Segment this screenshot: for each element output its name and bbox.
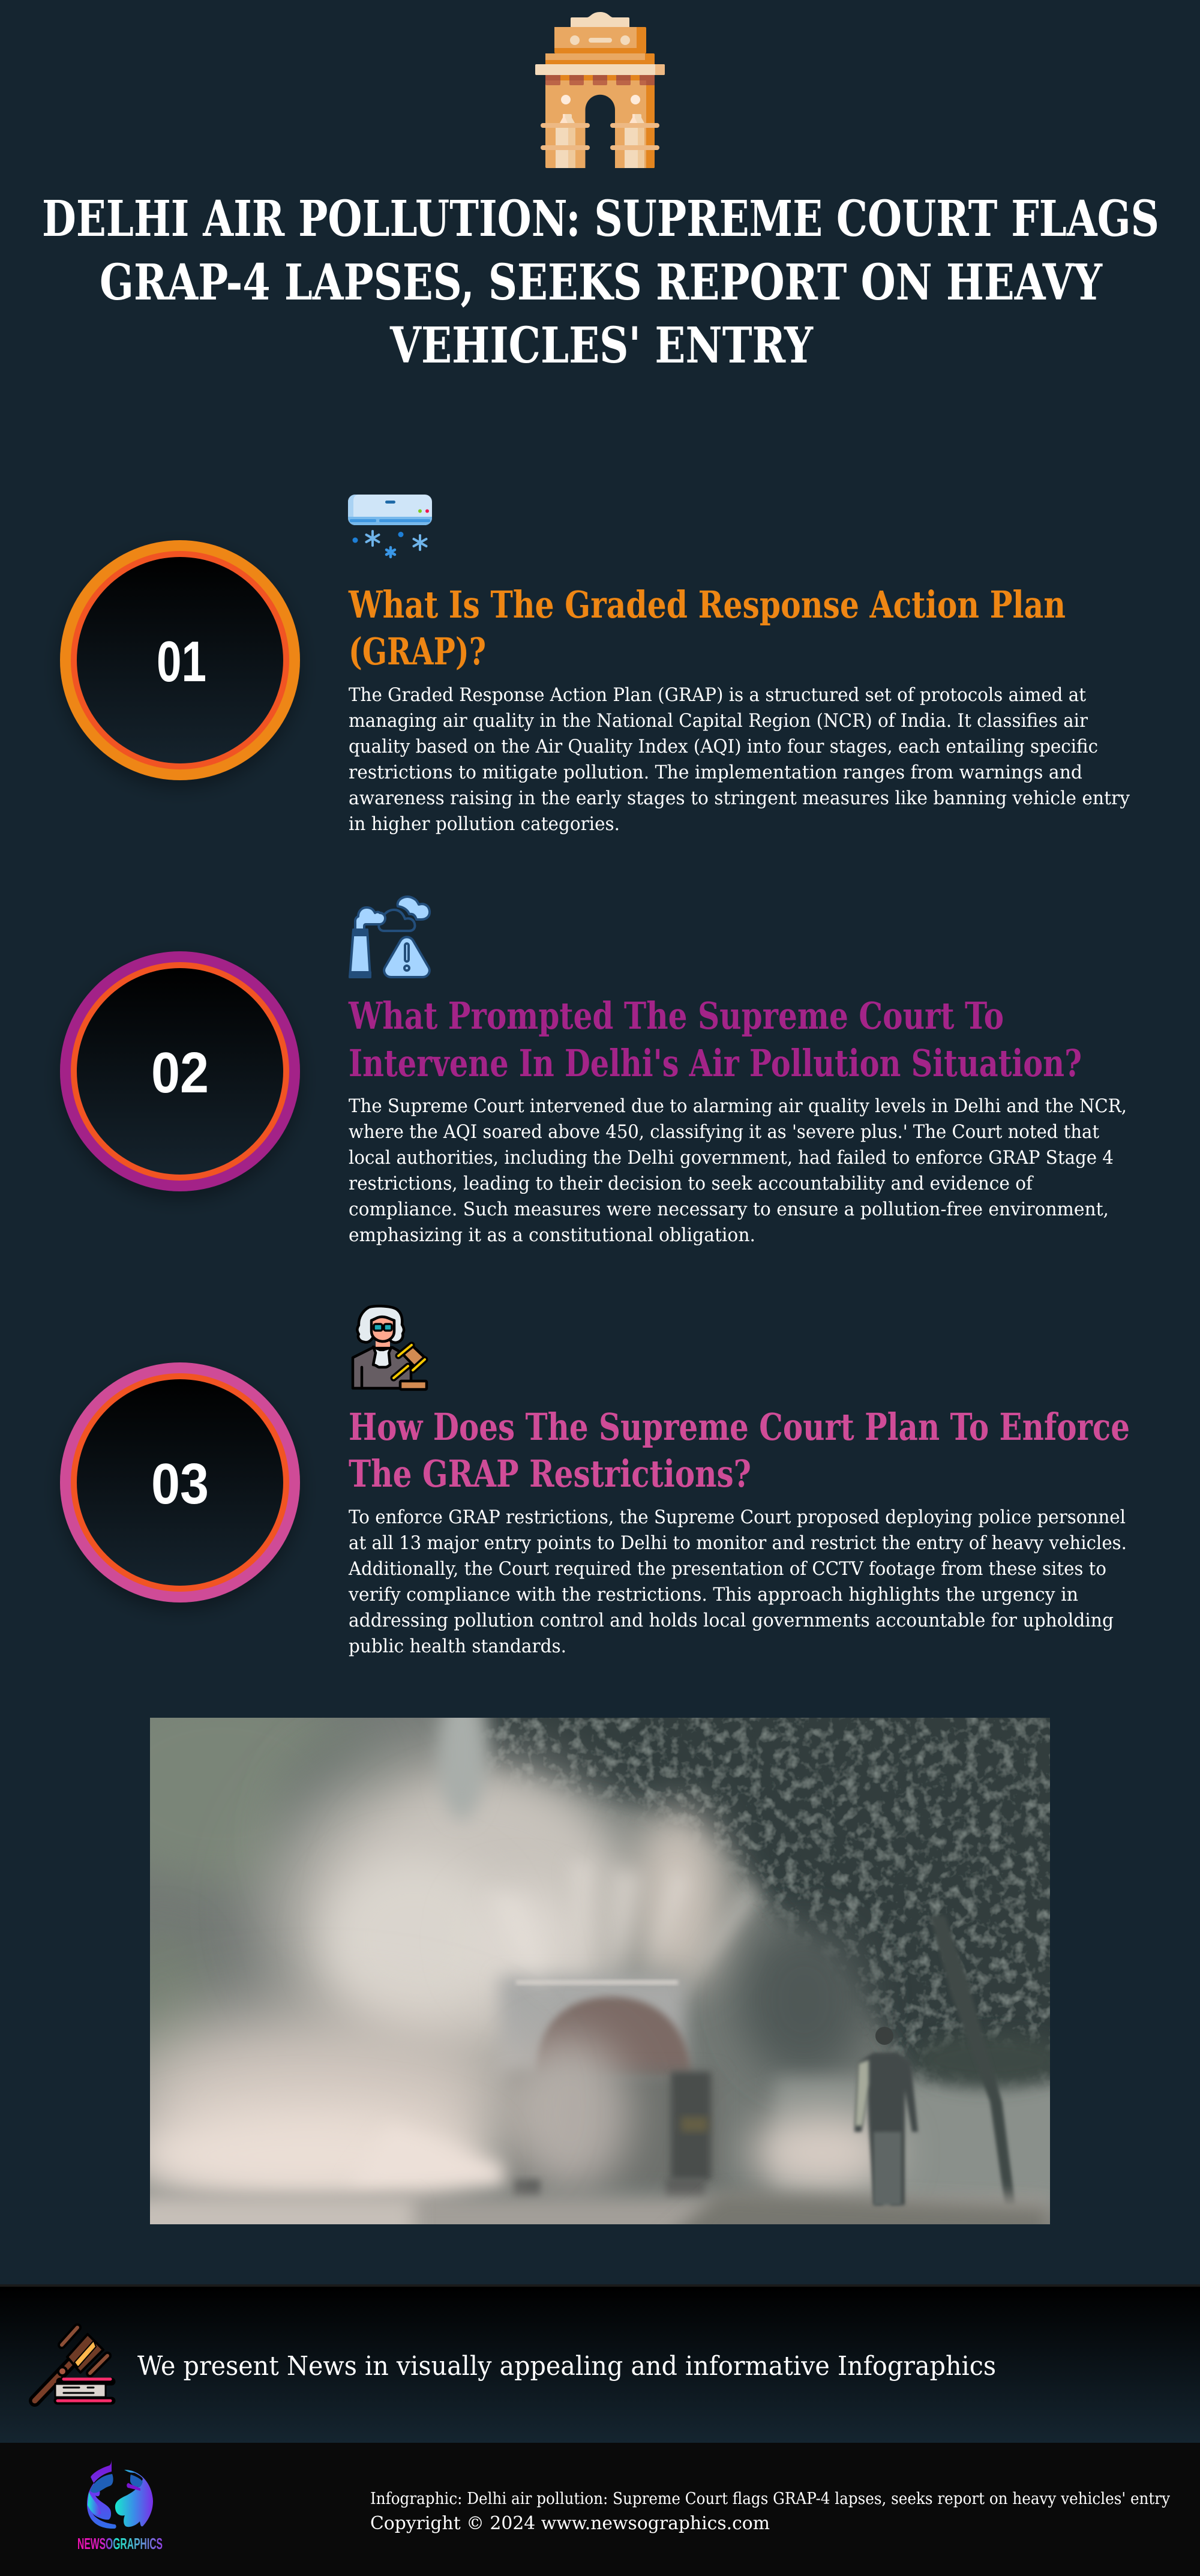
number badge 03 xyxy=(60,1362,300,1602)
footer credit text xyxy=(370,2490,1171,2534)
body text 03: To enforce GRAP restrictions, the Supreme Court proposed deploying police personnel xyxy=(349,1506,1126,1528)
logo: Newsographics xyxy=(77,2460,163,2553)
number badge 02 xyxy=(60,951,300,1191)
body text 03: Additionally, the Court required the presentation of CCTV footage from these sites to xyxy=(348,1558,1106,1580)
body text 02 xyxy=(349,1095,1127,1246)
title: VEHICLES' ENTRY xyxy=(389,317,814,375)
body text 02: local authorities, including the Delhi government, had failed to enforce GRAP Stage 4 xyxy=(349,1147,1114,1169)
icon: factory smoke and warning xyxy=(350,897,430,977)
heading 01: (GRAP)? xyxy=(349,630,486,673)
panel: tagline banner xyxy=(0,2287,1200,2443)
body text 01: restrictions to mitigate pollution. The implementation ranges from warnings and xyxy=(349,762,1082,783)
panel: section 03 xyxy=(60,1306,1130,1657)
heading 03 xyxy=(349,1405,1130,1496)
number badge 01 xyxy=(60,540,300,780)
icon: India Gate xyxy=(535,12,665,168)
logo: Newsographics: NEWSOGRAPHICS xyxy=(77,2535,163,2553)
body text 02: restrictions, leading to their decision to seek accountability and evidence of xyxy=(349,1173,1034,1194)
body text 01: managing air quality in the National Capital Region (NCR) of India. It classifies air xyxy=(349,710,1088,732)
footer credit text: Copyright © 2024 www.newsographics.com xyxy=(370,2513,770,2534)
body text 01: quality based on the Air Quality Index (AQI) into four stages, each entailing specific xyxy=(349,736,1098,757)
body text 02: compliance. Such measures were necessary to ensure a pollution-free environment, xyxy=(349,1199,1109,1220)
body text 02: where the AQI soared above 450, classifying it as 'severe plus.' The Court noted that xyxy=(349,1121,1099,1143)
heading 02 xyxy=(348,994,1082,1085)
photo: water-sprinkling tanker in smog with pedestrian xyxy=(150,1718,1050,2224)
body text 01: The Graded Response Action Plan (GRAP) is a structured set of protocols aimed at xyxy=(349,684,1087,706)
number badge 03: 03 xyxy=(151,1452,209,1516)
body text 02: The Supreme Court intervened due to alarming air quality levels in Delhi and the NCR, xyxy=(349,1095,1127,1117)
icon: judge with gavel xyxy=(353,1306,427,1389)
panel: footer xyxy=(0,2443,1200,2576)
body text 03: verify compliance with the restrictions. This approach highlights the urgency in xyxy=(348,1584,1078,1605)
body text 03: at all 13 major entry points to Delhi to monitor and restrict the entry of heavy vehicles. xyxy=(349,1532,1127,1554)
number badge 02: 02 xyxy=(151,1041,209,1105)
panel: section 01 xyxy=(60,495,1130,835)
heading 02: What Prompted The Supreme Court To xyxy=(348,994,1004,1038)
body text 01: awareness raising in the early stages to stringent measures like banning vehicle entry xyxy=(349,787,1130,809)
pedestrian silhouette xyxy=(854,2027,918,2205)
icon: air conditioner with snowflakes xyxy=(348,495,432,557)
body text 01 xyxy=(349,684,1130,835)
body text 02: emphasizing it as a constitutional obligation. xyxy=(349,1224,755,1246)
banner text: We present News in visually appealing and informative Infographics xyxy=(137,2351,996,2382)
title xyxy=(42,190,1159,375)
icon: gavel and book xyxy=(35,2328,112,2401)
body text 03: addressing pollution control and holds local governments accountable for upholding xyxy=(349,1610,1114,1631)
body text 03 xyxy=(348,1506,1127,1657)
divider strip above banner xyxy=(0,2284,1200,2287)
panel: section 02 xyxy=(60,897,1127,1246)
heading 01 xyxy=(348,583,1066,673)
body text 01: in higher pollution categories. xyxy=(349,813,620,835)
number badge 01: 01 xyxy=(157,630,206,694)
heading 03: The GRAP Restrictions? xyxy=(349,1452,751,1496)
body text 03: public health standards. xyxy=(349,1636,566,1657)
